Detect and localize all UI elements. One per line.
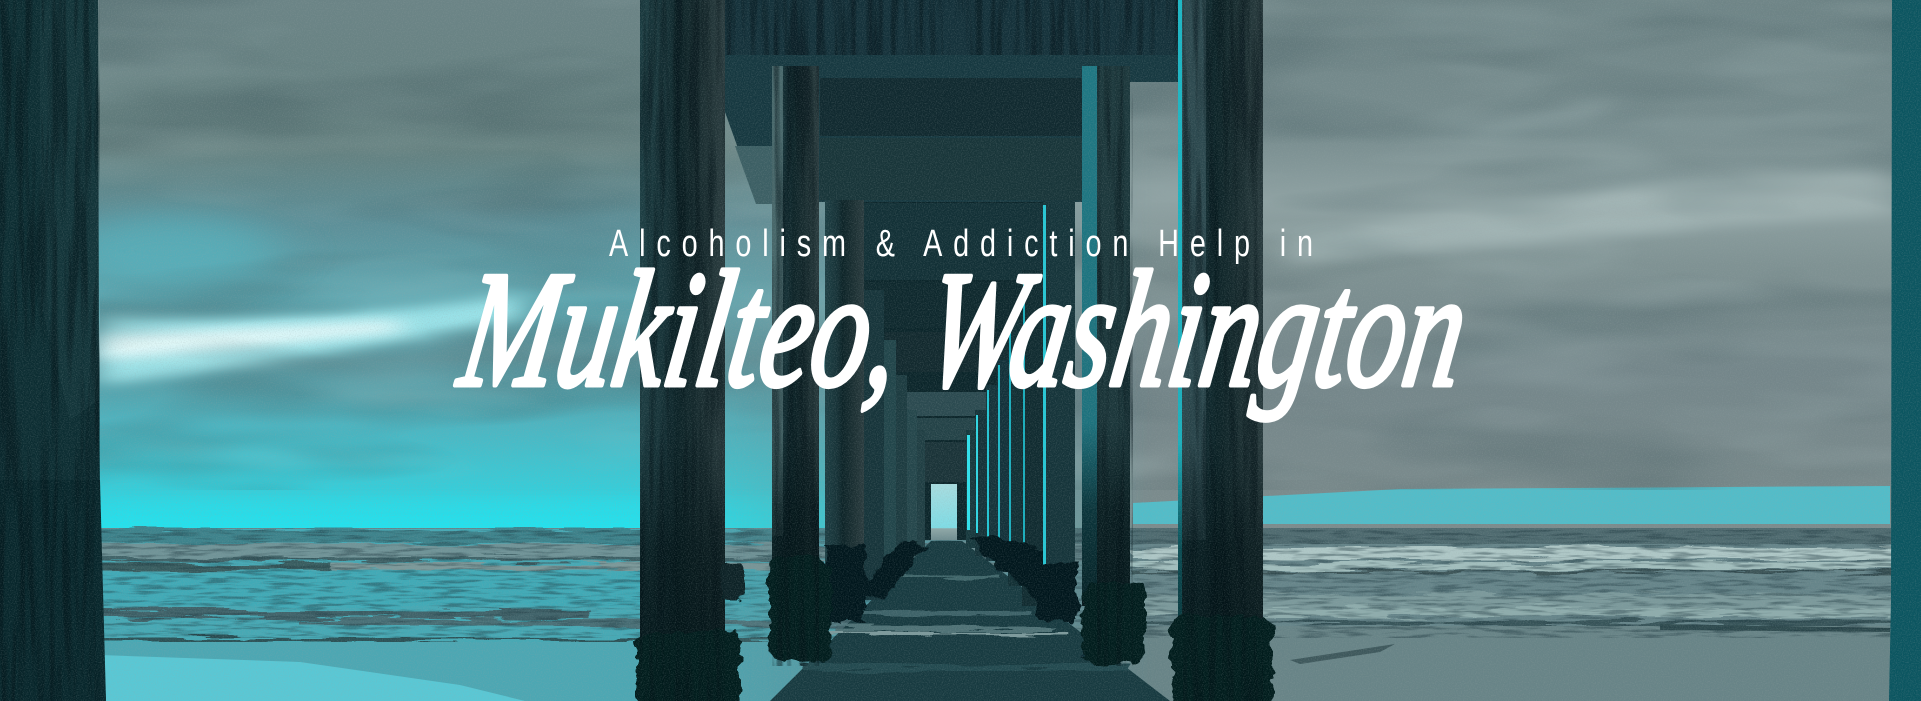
wet sand teal [173, 642, 746, 644]
beam 2 [825, 203, 1075, 280]
water glints [800, 575, 1130, 670]
water under pier [770, 541, 1170, 701]
far pillars left [856, 290, 925, 600]
pillar R3 [1037, 200, 1078, 622]
subtitle: Alcoholism & Addiction Help in [609, 223, 1313, 265]
deck lower panel [820, 138, 1082, 200]
beam 5 [905, 392, 995, 416]
sea: cyan left side [101, 526, 1082, 701]
cyan horizon band right [1133, 486, 1890, 524]
sand streak [1660, 624, 1890, 632]
cloud: pale streak right [1290, 165, 1890, 265]
left foreground pillar [0, 0, 106, 701]
sky: grey right side [0, 0, 1921, 530]
pillar L2 [769, 66, 831, 661]
beam 4 [885, 332, 1020, 372]
cloud: bright streak [100, 295, 520, 385]
beam 6 [915, 418, 983, 440]
light opening at end of pier [931, 484, 957, 540]
beam 3 [864, 282, 1044, 328]
cloud: teal glow left [98, 206, 282, 283]
deck ledge left [735, 146, 772, 204]
sky: cloud texture [100, 0, 1892, 490]
distant water [1000, 528, 1921, 544]
pier: far corridor [725, 0, 1178, 540]
right foreground pillar [1889, 0, 1921, 701]
pillar weathering [0, 0, 1300, 701]
deck mid panel [820, 78, 1082, 136]
bright sand [100, 655, 525, 701]
beam 7 [923, 442, 975, 482]
sea: water texture [100, 530, 1892, 638]
sand streak left [1290, 644, 1395, 664]
pillar R2 [1082, 66, 1145, 664]
cyan horizon glow [100, 498, 860, 530]
wet sand [1000, 626, 1921, 701]
title: Mukilteo, Washington [449, 238, 1479, 422]
whitecaps [1130, 547, 1921, 625]
sea: grey right side [0, 528, 1921, 701]
pillar R1 [1172, 0, 1274, 701]
deck top beam [725, 0, 1178, 55]
pillar L1 [636, 0, 743, 701]
far pillars right [966, 270, 1046, 606]
sky: cyan left side [98, 38, 1082, 528]
pillar L3 [825, 200, 865, 622]
cloud: white core [100, 320, 400, 360]
deck underside [725, 0, 1178, 204]
cloud: pale streak upper right [1480, 100, 1620, 138]
